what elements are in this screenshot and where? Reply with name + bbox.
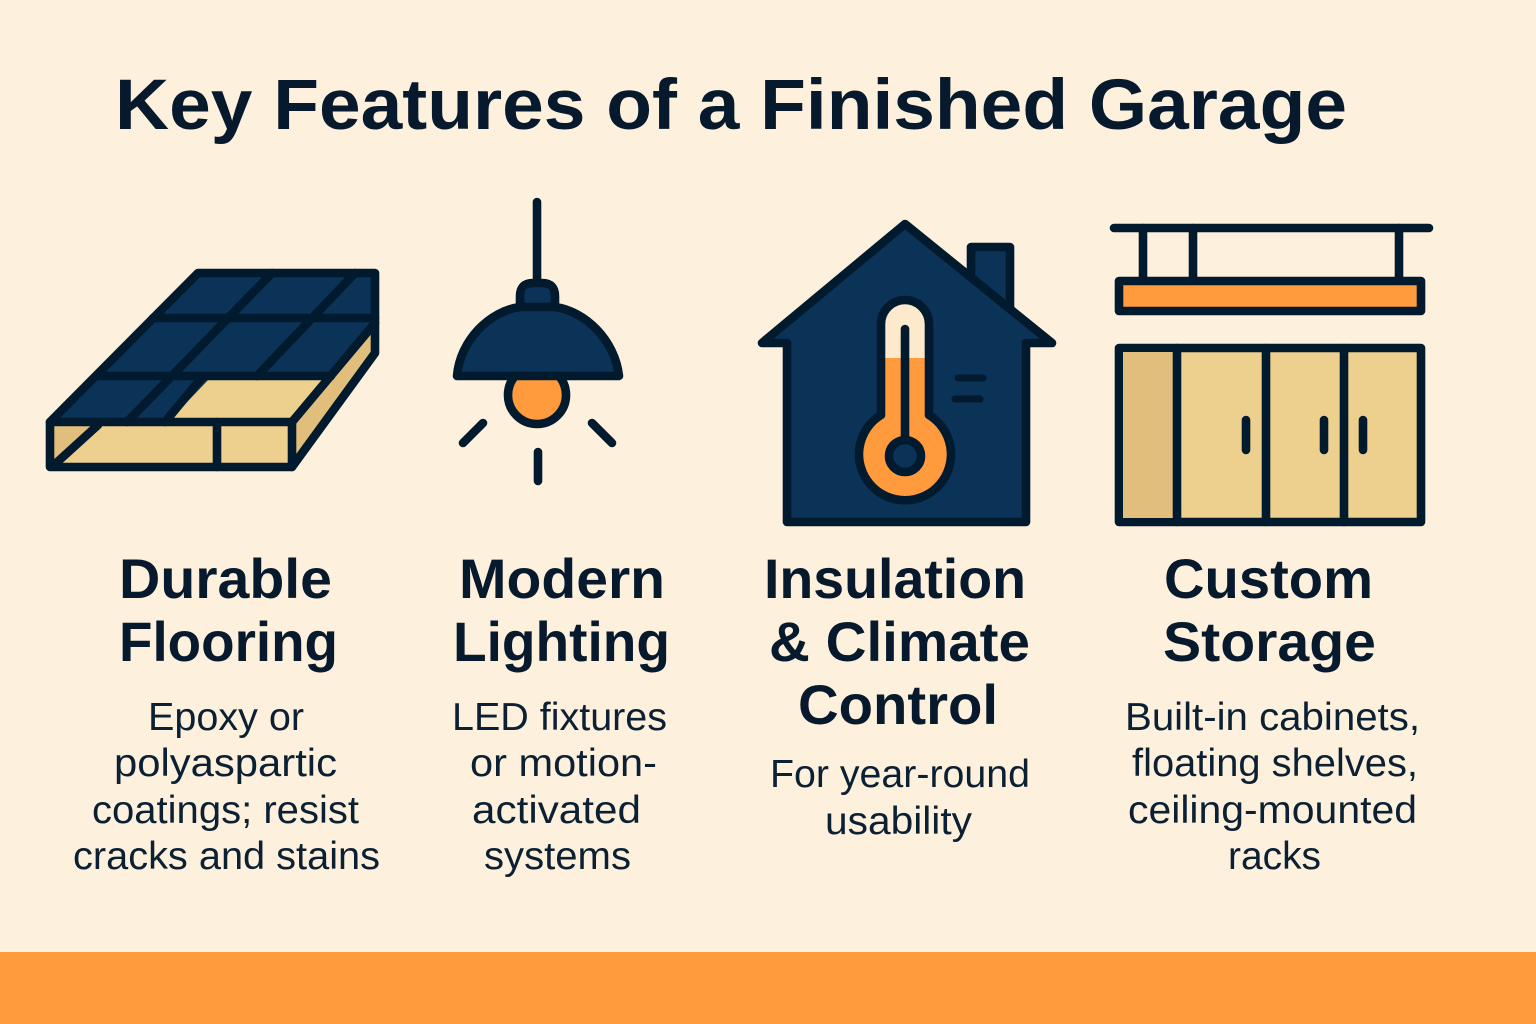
- icon: shelf and cabinets: [1114, 228, 1429, 522]
- description: custom storage: [1125, 696, 1420, 878]
- icon: house with thermometer: [762, 224, 1052, 522]
- panel: modern lighting: [452, 202, 670, 878]
- description: durable flooring: cracks and stains: [73, 835, 380, 878]
- description: modern lighting: [452, 696, 667, 878]
- description: durable flooring: coatings; resist: [92, 789, 359, 832]
- icon: floor tiles slab: [50, 273, 375, 467]
- heading: insulation and climate control: [764, 547, 1030, 736]
- heading: custom storage: Custom: [1164, 547, 1373, 610]
- description: durable flooring: polyaspartic: [114, 742, 337, 785]
- panel: custom storage: [1114, 228, 1429, 878]
- heading: modern lighting: Lighting: [453, 610, 670, 673]
- description: insulation and climate control: usability: [825, 800, 973, 843]
- heading: insulation and climate control: Insulation: [764, 547, 1026, 610]
- description: custom storage: racks: [1228, 835, 1321, 878]
- description: modern lighting: activated: [472, 789, 641, 832]
- heading: modern lighting: Modern: [459, 547, 665, 610]
- description: insulation and climate control: [770, 753, 1030, 843]
- heading: modern lighting: [453, 547, 670, 673]
- heading: custom storage: Storage: [1163, 610, 1376, 673]
- description: custom storage: ceiling-mounted: [1128, 789, 1417, 832]
- panel: insulation and climate control: [762, 224, 1052, 843]
- icon: pendant lamp: [457, 202, 619, 481]
- description: modern lighting: LED fixtures: [452, 696, 667, 739]
- heading: insulation and climate control: Control: [798, 673, 998, 736]
- heading: durable flooring: Flooring: [119, 610, 338, 673]
- heading: durable flooring: [119, 547, 338, 673]
- description: custom storage: floating shelves,: [1132, 742, 1418, 785]
- description: durable flooring: [73, 696, 380, 878]
- heading: custom storage: [1163, 547, 1376, 673]
- heading: durable flooring: Durable: [119, 547, 332, 610]
- title: Key Features of a Finished Garage: [115, 66, 1347, 145]
- footer band: [0, 952, 1536, 1024]
- description: custom storage: Built-in cabinets,: [1125, 696, 1420, 739]
- description: modern lighting: or motion-: [470, 742, 657, 785]
- description: modern lighting: systems: [484, 835, 631, 878]
- description: insulation and climate control: For year-round: [770, 753, 1030, 796]
- panel: durable flooring: [50, 273, 380, 878]
- heading: insulation and climate control: & Climate: [769, 610, 1030, 673]
- description: durable flooring: Epoxy or: [148, 696, 304, 739]
